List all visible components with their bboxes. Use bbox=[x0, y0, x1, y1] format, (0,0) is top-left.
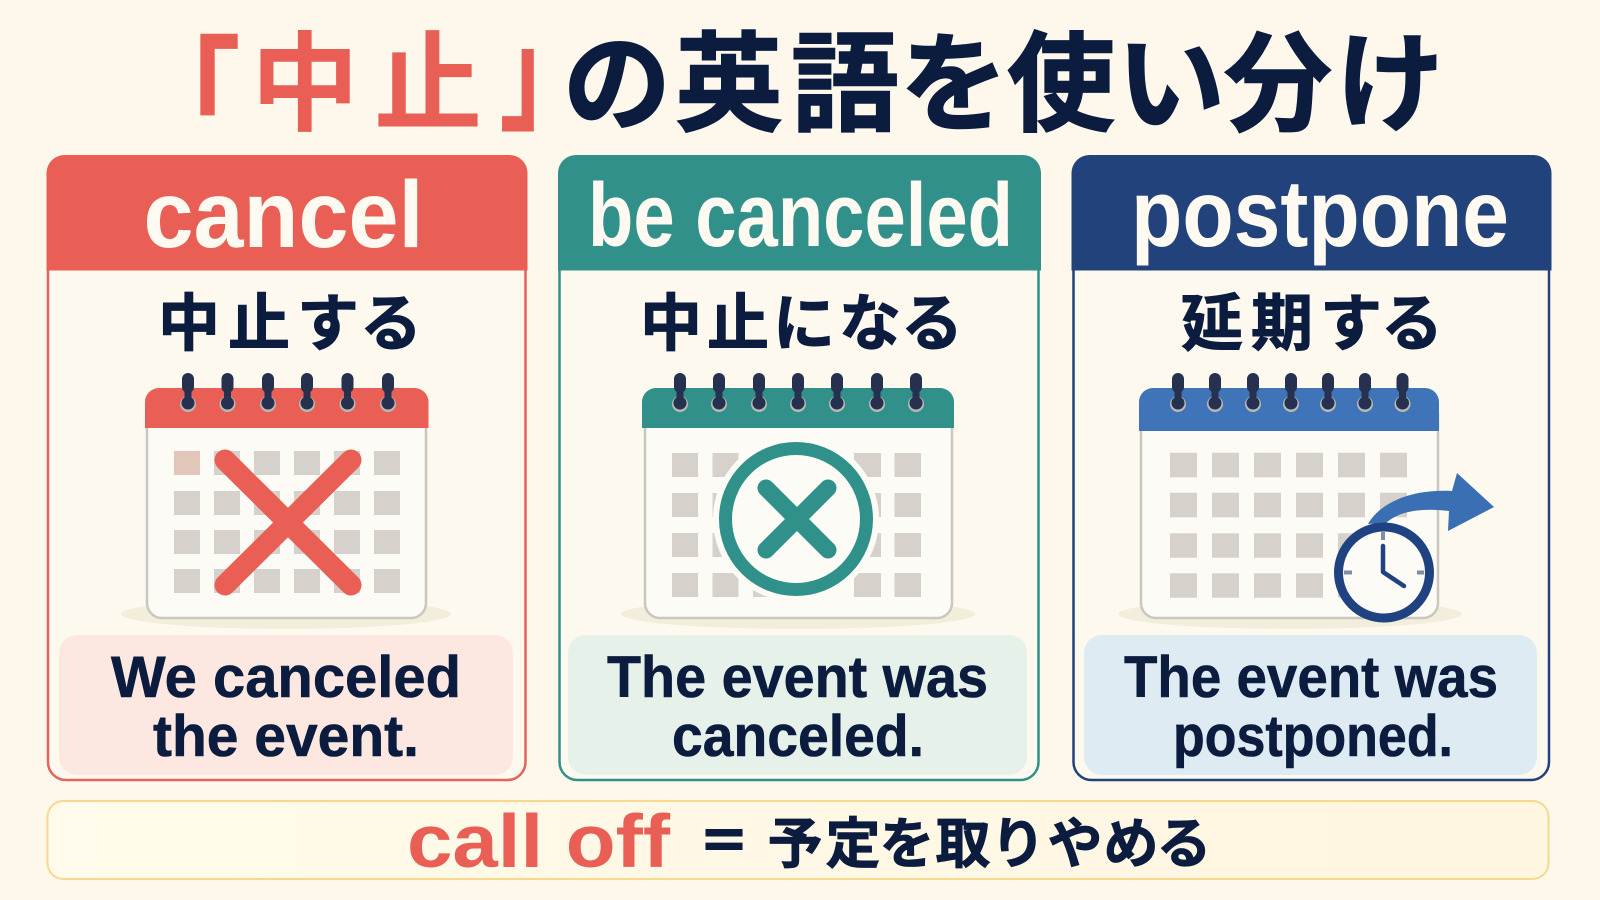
title: red keyword: 中止 bbox=[251, 24, 482, 145]
Japanese meaning: 延期する bbox=[1181, 290, 1443, 359]
arrow bbox=[1368, 473, 1494, 531]
example sentence: We canceled bbox=[111, 645, 461, 710]
Japanese meaning: 中止になる bbox=[640, 290, 963, 359]
example sentence: postponed. bbox=[1173, 704, 1453, 769]
panel: postpone bbox=[1072, 155, 1552, 780]
card header: cancel bbox=[144, 162, 424, 268]
example sentence bbox=[1084, 635, 1537, 775]
icon: calendar with X bbox=[121, 379, 451, 629]
title bbox=[132, 6, 1444, 168]
card frame bbox=[560, 175, 1038, 780]
card header bbox=[46, 155, 528, 270]
icon: calendar with circled X bbox=[621, 379, 975, 629]
meaning: 予定を取りやめる bbox=[767, 813, 1212, 875]
example sentence bbox=[59, 635, 513, 775]
equals sign: = bbox=[704, 811, 744, 867]
example sentence: The event was bbox=[1124, 645, 1498, 710]
callout: call off bbox=[48, 799, 1548, 883]
card frame bbox=[1074, 175, 1549, 780]
example sentence: The event was bbox=[607, 645, 988, 710]
title: closing bracket: 」 bbox=[500, 6, 592, 146]
card header: postpone bbox=[1131, 161, 1509, 267]
example sentence bbox=[568, 635, 1027, 775]
title: opening bracket: 「 bbox=[132, 29, 240, 168]
panel: be canceled bbox=[558, 155, 1041, 780]
Japanese meaning: 中止する bbox=[158, 290, 422, 359]
title: dark text: の英語を使い分け bbox=[563, 24, 1444, 145]
call off term: call off bbox=[407, 799, 671, 883]
icon: calendar with clock and arrow bbox=[1118, 379, 1494, 629]
card frame bbox=[48, 175, 526, 780]
example sentence: canceled. bbox=[672, 704, 924, 769]
card header: be canceled bbox=[588, 166, 1013, 266]
clock bbox=[1338, 527, 1430, 618]
example sentence: the event. bbox=[153, 704, 419, 769]
panel: cancel bbox=[46, 155, 528, 780]
